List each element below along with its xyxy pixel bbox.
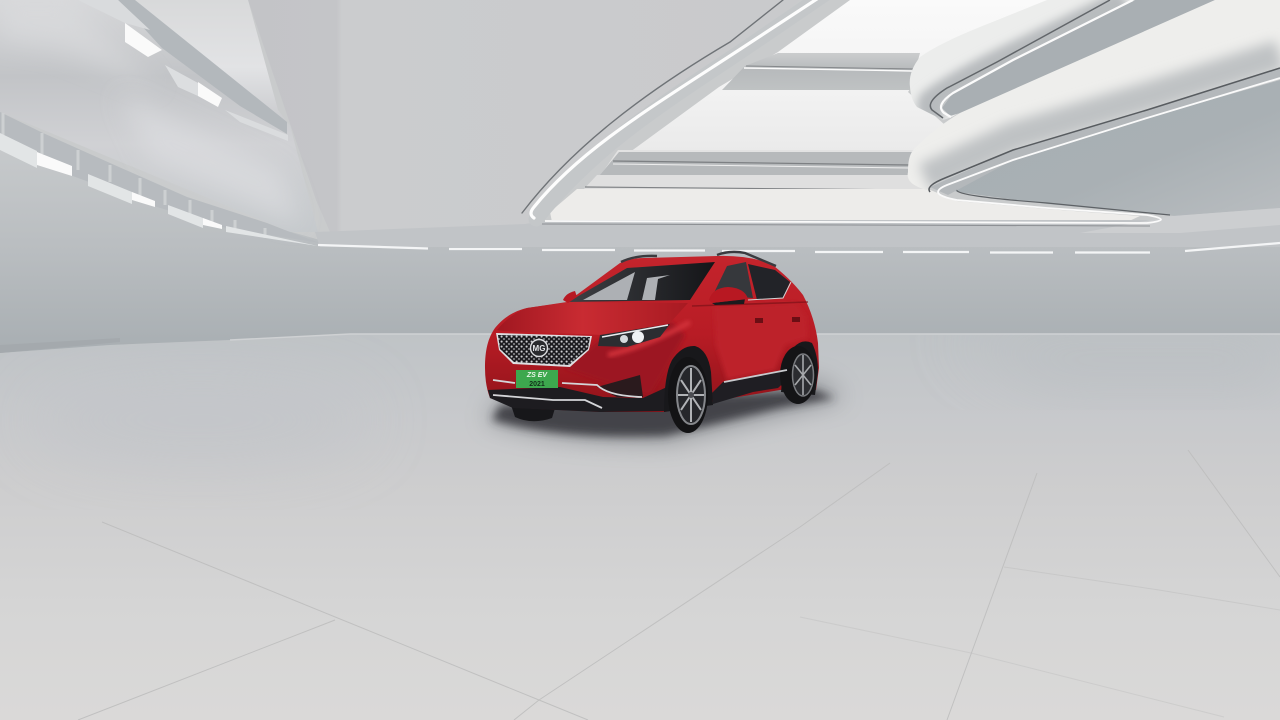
window sill trim bbox=[748, 282, 791, 300]
door handles bbox=[755, 317, 800, 323]
floor-wall skirting bbox=[230, 334, 1280, 340]
grille bbox=[496, 333, 592, 367]
grille: MG bbox=[533, 344, 545, 353]
windshield reflection bbox=[583, 272, 670, 300]
windshield bbox=[568, 262, 715, 302]
front wheel arch bbox=[664, 346, 713, 412]
bumper chrome bbox=[493, 380, 642, 408]
headlight bbox=[598, 324, 670, 347]
fog lamp recess bbox=[597, 375, 643, 397]
floor bbox=[0, 334, 1280, 720]
side cladding bbox=[712, 370, 792, 404]
car body bbox=[485, 256, 819, 412]
rear wheel arch bbox=[781, 341, 818, 395]
roof rails bbox=[621, 252, 776, 266]
upper window strip bbox=[78, 0, 288, 141]
upper curved ledge bbox=[910, 0, 1147, 120]
lower skylight panels bbox=[550, 175, 1140, 222]
front fender shade bbox=[565, 322, 685, 395]
curved white light strip bbox=[522, 0, 825, 219]
back wall bbox=[0, 150, 1280, 353]
left skirting blocks bbox=[0, 338, 120, 353]
lower window strip bbox=[0, 112, 320, 246]
front wheel bbox=[668, 357, 708, 433]
upper skylight beam bbox=[722, 53, 920, 90]
horizontal wall light dashes bbox=[318, 243, 1280, 252]
lower ceiling band bbox=[315, 207, 1280, 247]
far front tyre bbox=[511, 405, 556, 421]
wing mirror bbox=[709, 287, 748, 305]
side chrome trim bbox=[724, 370, 787, 382]
upper ledge white strip bbox=[941, 0, 1133, 117]
right ceiling panel, upper bbox=[942, 0, 1215, 116]
left mirror bbox=[563, 291, 577, 303]
door crease bbox=[692, 302, 808, 306]
number plate: ZS EV bbox=[526, 372, 548, 379]
door highlight bbox=[714, 303, 808, 380]
right ceiling panel, lower bbox=[948, 80, 1280, 216]
rear wheel bbox=[780, 346, 816, 404]
central ceiling panel bbox=[248, 0, 800, 232]
car shadow bbox=[485, 380, 845, 442]
left upper wall bbox=[0, 0, 318, 232]
side rear window bbox=[748, 264, 790, 300]
number plate bbox=[516, 370, 558, 388]
skylight white areas bbox=[600, 0, 1060, 176]
side front window bbox=[713, 262, 753, 298]
middle skylight beam bbox=[600, 152, 915, 175]
soffit below right panel bbox=[1080, 208, 1280, 233]
fender highlight bbox=[608, 322, 690, 355]
red SUV bbox=[485, 252, 819, 433]
number plate: 2021 bbox=[529, 381, 545, 388]
hood bbox=[497, 302, 688, 335]
top-left bright wedge bbox=[125, 0, 287, 122]
lower curved ledge bbox=[542, 0, 1280, 226]
lower black bumper bbox=[488, 387, 667, 412]
